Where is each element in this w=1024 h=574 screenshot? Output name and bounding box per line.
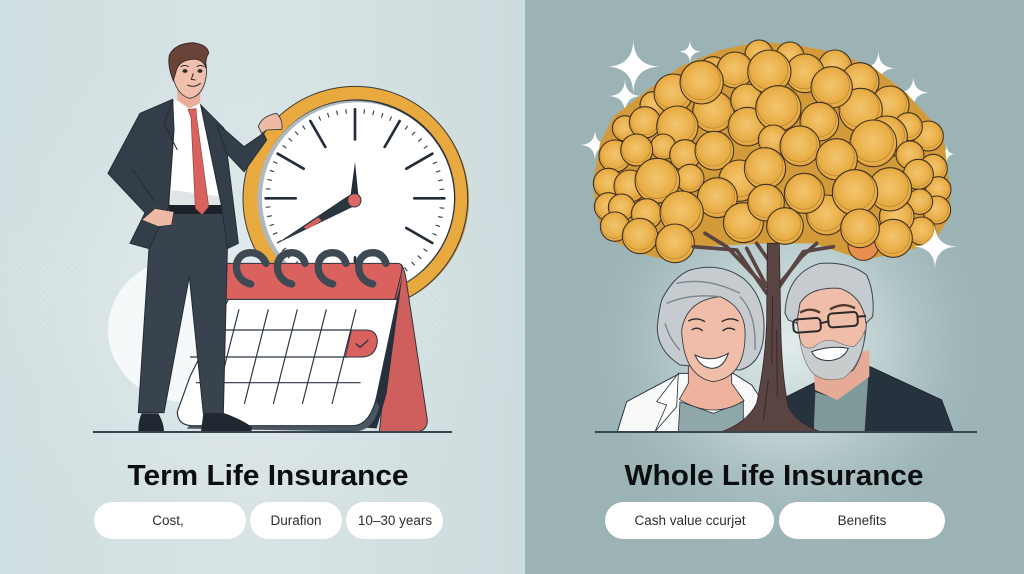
eyes, nose and mouth <box>181 65 204 86</box>
jacket <box>108 99 174 249</box>
hair <box>169 43 209 81</box>
shirt <box>170 98 222 205</box>
trousers <box>138 205 227 413</box>
pill: 10-30 years: 10–30 years <box>358 513 432 528</box>
calendar grid <box>190 309 361 404</box>
tree trunk and branches <box>693 233 833 432</box>
ground line: whole <box>595 431 977 433</box>
figure: older woman <box>617 267 764 432</box>
coin tree canopy <box>593 40 951 263</box>
illustration: whole life <box>580 40 957 432</box>
title: whole life insurance: Whole Life Insurance <box>624 460 924 492</box>
sparkle: lower right <box>913 225 957 269</box>
belt <box>169 205 224 214</box>
sparkles <box>580 40 955 163</box>
hand on clock <box>258 113 282 133</box>
figure: older man <box>785 263 953 432</box>
panel: whole life background <box>525 0 1024 574</box>
pill: cash value <box>605 502 774 539</box>
icon: calendar <box>177 253 427 432</box>
title: term life insurance: Term Life Insurance <box>128 460 408 492</box>
panel: term life background <box>2 159 464 450</box>
icon: clock <box>243 86 469 311</box>
pill: 10-30 years <box>346 502 443 539</box>
calendar rings <box>236 253 386 284</box>
illustration: term life <box>108 43 469 432</box>
pill: benefits: Benefits <box>838 513 887 528</box>
pill: benefits <box>779 502 945 539</box>
clock hands <box>276 162 361 244</box>
highlighted date with check <box>345 330 377 357</box>
shoes <box>138 413 252 432</box>
face <box>172 53 207 98</box>
figure: businessman <box>108 43 282 432</box>
pill: cost <box>94 502 246 539</box>
hand on hip <box>142 208 174 227</box>
tie <box>188 109 209 215</box>
pill: cash value: Cash value ccurjət <box>634 513 746 528</box>
ground line: term <box>93 431 452 433</box>
pill: duration <box>250 502 342 539</box>
pill: cost: Cost, <box>152 513 184 528</box>
pill: duration: Durafion <box>270 513 322 528</box>
neck <box>177 88 201 109</box>
